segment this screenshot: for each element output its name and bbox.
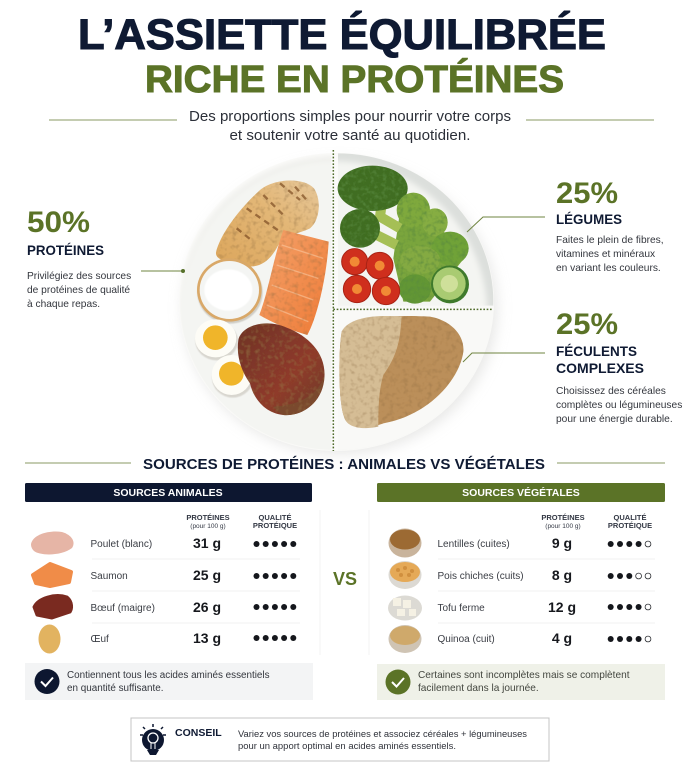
icon: chickpeas [388, 561, 422, 589]
icon: chicken [31, 532, 74, 554]
panel: protein share: Privilégiez des sources [27, 271, 131, 282]
plate compartments [331, 154, 494, 448]
plant table text: Lentilles (cuites) [438, 539, 510, 550]
column heads: (pour 100 g) [545, 523, 581, 530]
food: grains [339, 316, 463, 428]
column heads: PROTÉIQUE [608, 521, 652, 530]
food: eggs [195, 319, 253, 398]
column heads: (pour 100 g) [190, 523, 226, 530]
icon: egg [38, 624, 60, 654]
column heads: PROTÉIQUE [253, 521, 297, 530]
panel: protein share: PROTÉINES [27, 242, 104, 258]
note: complete proteins [25, 663, 313, 700]
panel: starches share: Choisissez des céréales [556, 386, 666, 397]
dotted dividers [333, 150, 493, 451]
column heads [541, 513, 652, 530]
plant table text: Tofu ferme [438, 603, 485, 614]
food: tomatoes [342, 249, 400, 305]
plant table text [438, 539, 524, 645]
panel: advice: CONSEIL [175, 727, 222, 739]
panel: advice: Variez vos sources de protéines et associez céréales + légumineuses [238, 729, 527, 740]
panel: starches share: complètes ou légumineuses [556, 400, 682, 411]
title: L’ASSIETTE ÉQUILIBRÉE [78, 11, 606, 59]
header bar: SOURCES VÉGÉTALES [462, 486, 580, 499]
icon: tofu [388, 596, 422, 620]
column heads: QUALITÉ [614, 513, 646, 522]
header bar [25, 483, 312, 502]
panel: animal sources: 13 g [193, 630, 221, 646]
panel: animal sources: 25 g [193, 567, 221, 583]
plant table text: Pois chiches (cuits) [438, 571, 524, 582]
panel: plant sources: 9 g [552, 535, 572, 551]
panel: protein share [27, 206, 185, 310]
panel: vegetables share [467, 177, 664, 274]
column heads [186, 513, 297, 530]
subtitle: et soutenir votre santé au quotidien. [230, 127, 470, 144]
plate illustration [179, 148, 500, 469]
panel: vegetables share: vitamines et minéraux [556, 249, 655, 260]
vs label: VS [333, 569, 357, 589]
icon: quinoa [388, 625, 422, 653]
food: cucumber [431, 265, 469, 303]
animal table text: Œuf [90, 634, 109, 645]
food: beef steak [238, 323, 325, 415]
panel: starches share: 25% [556, 308, 618, 341]
panel: plant sources: 8 g [552, 567, 572, 583]
panel: starches share: pour une énergie durable. [556, 414, 673, 425]
panel: animal sources: 26 g [193, 599, 221, 615]
animal table text: Bœuf (maigre) [90, 603, 155, 614]
note: incomplete proteins: facilement dans la journée. [418, 683, 539, 694]
note: complete proteins: Contiennent tous les acides aminés essentiels [67, 670, 270, 681]
animal table text: Saumon [90, 571, 128, 582]
vs label [320, 510, 369, 655]
panel: advice [131, 718, 549, 761]
column heads: QUALITÉ [259, 513, 291, 522]
icon: lentils [388, 528, 422, 558]
subtitle [49, 108, 654, 144]
panel: protein share: 50% [27, 206, 90, 239]
title [78, 11, 606, 101]
icon: light bulb [140, 724, 166, 755]
panel: vegetables share: Faites le plein de fibres, [556, 235, 664, 246]
animal table text: Poulet (blanc) [90, 539, 152, 550]
panel: plant sources: 12 g [548, 599, 576, 615]
food: salmon [259, 230, 329, 335]
panel: starches share: FÉCULENTS [556, 343, 637, 359]
food: broccoli [338, 166, 469, 304]
column heads: PROTÉINES [541, 513, 585, 522]
panel: vegetables share: LÉGUMES [556, 211, 622, 227]
panel: plant sources [377, 483, 665, 700]
panel: protein share: de protéines de qualité [27, 285, 130, 296]
header bar: SOURCES ANIMALES [113, 487, 223, 499]
panel: animal sources: 31 g [193, 535, 221, 551]
quality dots [608, 541, 651, 642]
panel: vegetables share: 25% [556, 177, 618, 210]
panel: animal sources [25, 483, 313, 700]
note: incomplete proteins: Certaines sont incomplètes mais se complètent [418, 670, 630, 681]
panel: vegetables share: en variant les couleurs. [556, 263, 661, 274]
note: complete proteins: en quantité suffisante. [67, 683, 163, 694]
food: yogurt bowl [197, 258, 263, 324]
animal table text [90, 539, 155, 645]
icon: salmon [33, 564, 71, 586]
panel: starches share [463, 308, 682, 425]
column heads: PROTÉINES [186, 513, 230, 522]
quality dots [254, 541, 296, 641]
note: incomplete proteins [377, 664, 665, 700]
section heading: SOURCES DE PROTÉINES : ANIMALES VS VÉGÉTALES [143, 456, 545, 473]
plant table text: Quinoa (cuit) [438, 634, 495, 645]
food: chicken [216, 181, 319, 266]
subtitle: Des proportions simples pour nourrir votre corps [189, 108, 511, 125]
panel: protein share: à chaque repas. [27, 299, 100, 310]
panel: advice: pour un apport optimal en acides aminés essentiels. [238, 741, 456, 752]
panel: plant sources: 4 g [552, 630, 572, 646]
icon: beef [34, 596, 72, 618]
header bar [377, 483, 665, 502]
title: RICHE EN PROTÉINES [145, 57, 564, 101]
panel: starches share: COMPLEXES [556, 360, 644, 376]
